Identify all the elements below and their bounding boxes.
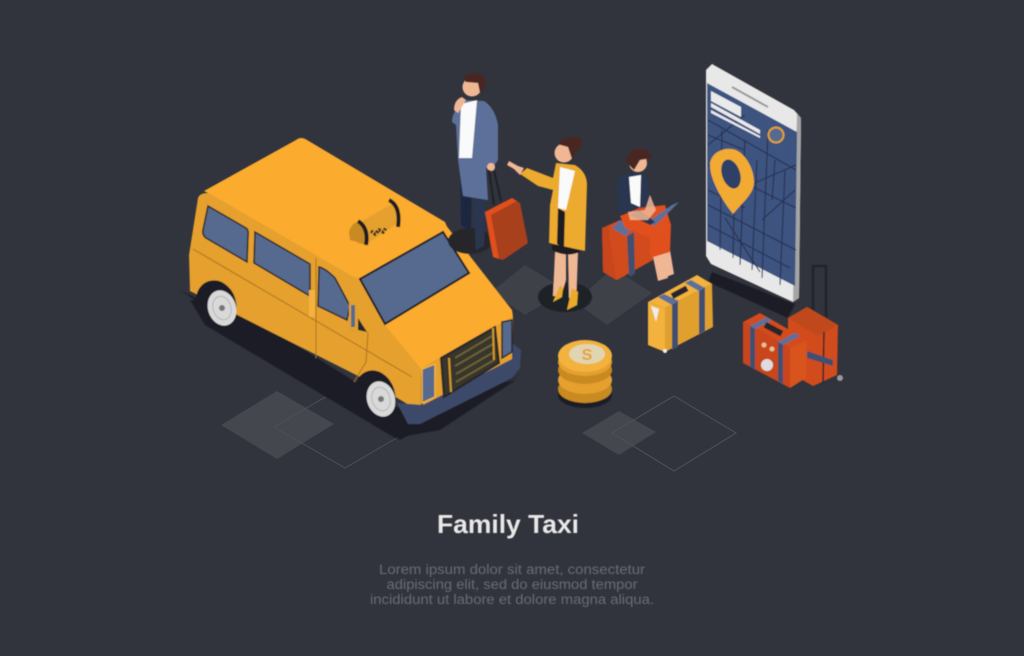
man with coat [448, 73, 498, 254]
coin stack [558, 340, 612, 408]
side windows [203, 206, 350, 320]
coin badge [768, 128, 784, 142]
coin dollar mark: S [582, 347, 593, 364]
skirt [552, 242, 580, 255]
phone with map [706, 64, 801, 302]
front bumper [397, 343, 521, 424]
van front face [421, 317, 513, 405]
woman in yellow [507, 137, 592, 312]
side crease lines [193, 249, 412, 382]
taxi van [180, 138, 521, 440]
van side body [189, 193, 421, 412]
wheels [190, 275, 402, 425]
yellow suitcase [648, 275, 713, 353]
taxi roof sign [349, 200, 399, 245]
headlights [422, 320, 512, 403]
seat suitcase [602, 220, 653, 280]
van hood [360, 224, 513, 369]
title: Family Taxi [437, 509, 579, 539]
phone shadow [708, 272, 795, 318]
map screen [707, 83, 797, 286]
coat [520, 163, 587, 251]
feet [652, 252, 668, 281]
laptop [647, 202, 679, 226]
header bars [711, 91, 760, 138]
description text: incididunt ut labore et dolore magna aliqua. [370, 592, 654, 607]
description text: Lorem ipsum dolor sit amet, consectetur [379, 562, 646, 577]
pin icon [710, 149, 754, 214]
description text: adipiscing elit, sed do eiusmod tempor [386, 577, 638, 592]
van shadow [180, 290, 520, 440]
grille [441, 327, 499, 397]
floor tiles [221, 265, 736, 471]
red rolling suitcase [485, 170, 528, 260]
van roof [204, 138, 448, 279]
legs and shoes [553, 252, 566, 296]
seated woman with laptop [602, 149, 679, 281]
jacket [616, 172, 653, 212]
mirror and door handles [309, 290, 367, 332]
red suitcases [743, 266, 843, 388]
description text [370, 562, 654, 607]
windshield [360, 232, 469, 324]
trousers [620, 205, 671, 258]
